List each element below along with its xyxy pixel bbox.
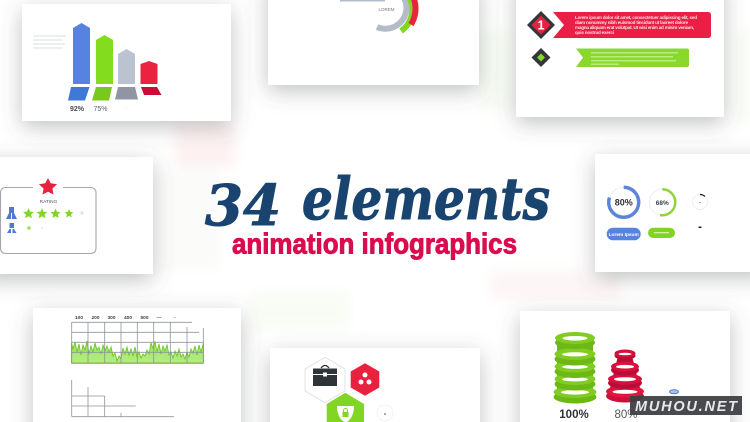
chart labels: — [157,316,162,321]
chart labels: 500 [140,315,149,321]
area chart [72,341,204,363]
rating label: RATING [40,199,58,205]
faint text block [33,35,66,49]
rating frame [0,188,96,254]
chart labels [75,315,176,321]
star row two [27,226,43,230]
diamond badge 2 [532,48,550,67]
button blue: Lorem Ipsum [609,232,639,238]
small circle [377,405,393,421]
red stack [606,350,644,402]
bar: red [140,61,162,95]
chart labels: 300 [107,315,116,321]
red ribbon: diam nonummy nibh euismod tincidunt ut laoreet dolore [575,20,688,25]
icon: red star [39,178,57,194]
chart labels: 200 [91,315,100,321]
chart labels: 400 [124,315,132,321]
button blue [607,228,641,240]
hexagon green lock [327,393,364,422]
star row one [23,208,84,218]
watermark: MUHOU.NET [635,399,738,415]
diamond badge 1 [527,11,555,39]
green ribbon [576,48,689,67]
ring small [692,194,708,210]
red ribbon: magna aliquam erat volutpat. Ut wisi enim ad minim veniam, [575,25,694,30]
bar: grey [115,49,138,100]
bar: blue [68,23,90,100]
label 92%: 92% [70,106,85,113]
title: 34 elements: elements [302,165,550,233]
red ribbon [553,12,711,38]
ring 68%: 68% [656,200,669,207]
dash [698,226,702,228]
ring 80%: 80% [615,198,633,208]
gauge arcs [340,0,416,31]
panel: hexagon icons [270,348,480,422]
panel: rating [0,157,153,274]
panel: line charts [33,308,241,422]
panel: numbered ribbons [516,0,724,117]
title: 34 elements [205,165,550,239]
blue ring [670,390,678,394]
ring 80% [609,187,639,217]
chart grid [72,322,203,363]
subtitle: animation infographics [232,228,517,260]
panel: arrow bar chart [22,4,231,121]
label 75%: 75% [93,106,108,113]
label faded: ... [124,104,128,109]
panel: ring stacks [520,311,730,422]
diamond badge 1: 1 [538,18,545,32]
red ribbon: Lorem ipsum dolor sit amet, consectetuer adipiscing elit, sed [575,15,697,20]
green stack [554,332,596,404]
chart labels: 100 [75,315,83,321]
gauge label: LOREM [378,7,395,12]
button green [648,228,675,238]
hexagon red network [351,363,379,396]
icon: person one [6,207,17,219]
red ribbon: quis nostrud exerci [575,30,614,35]
bar: green [92,35,113,100]
hexagon briefcase [305,357,345,403]
title: 34 elements: 34 [205,173,281,239]
lower chart [72,380,174,417]
panel: radial gauge [268,0,479,85]
ring 68% [649,189,675,215]
label 80%: 80% [614,409,638,421]
chart labels: - [174,316,176,321]
icon: person two [7,223,16,233]
panel: progress rings [595,154,750,272]
label 100%: 100% [559,409,589,421]
